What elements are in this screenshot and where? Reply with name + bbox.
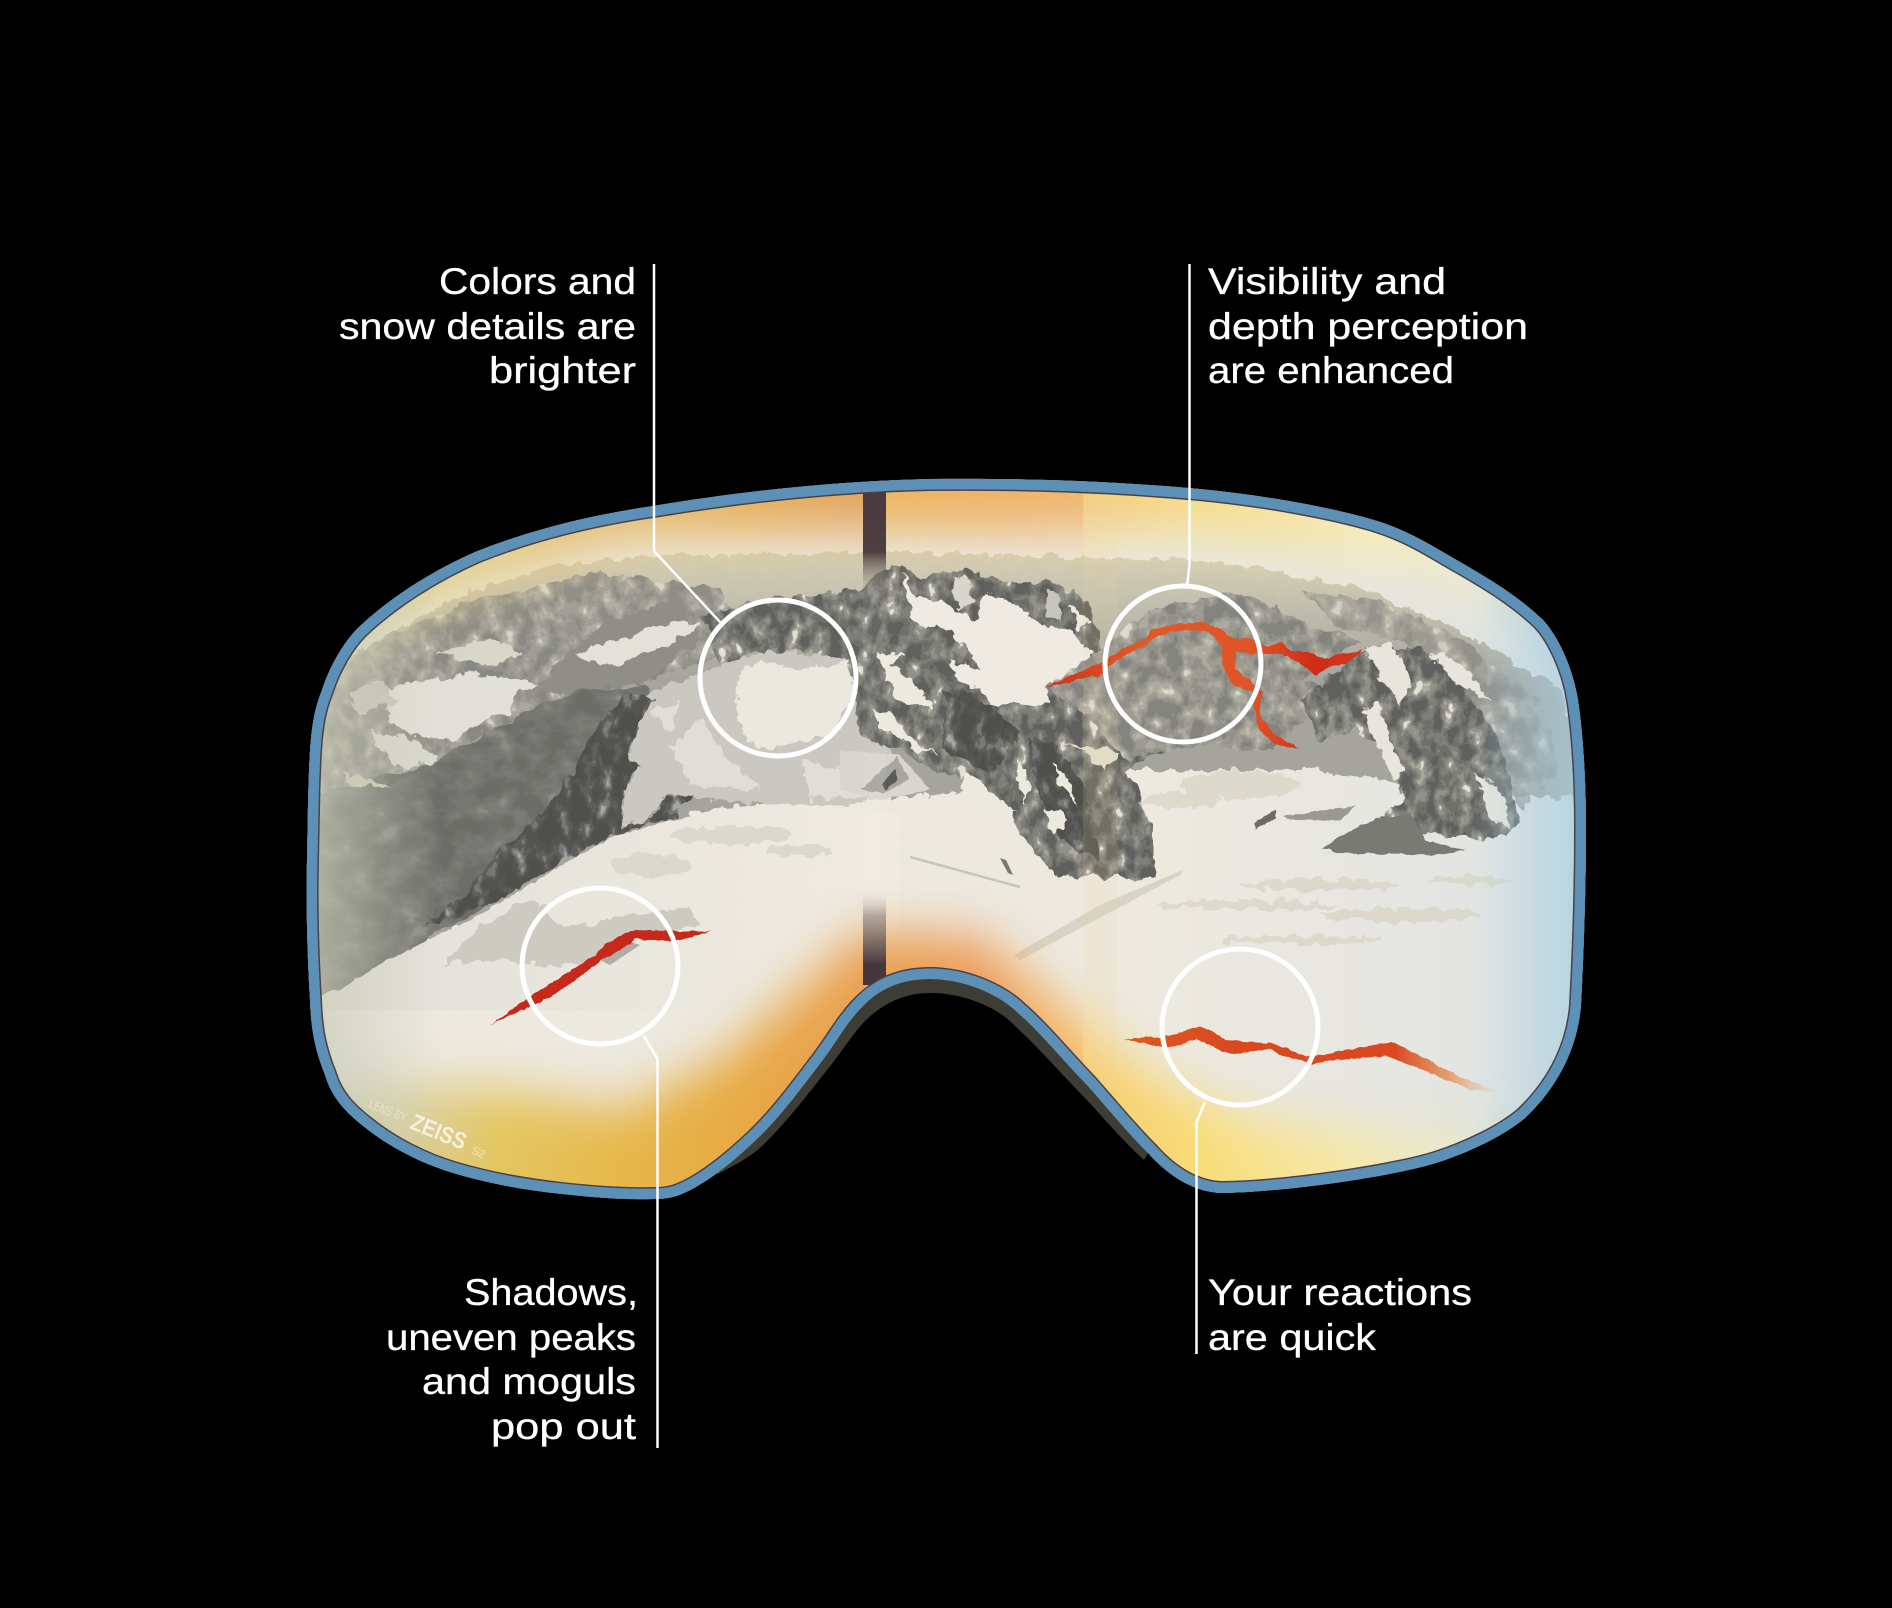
far mountain range (305, 552, 1590, 1000)
caption: shadows, peaks and moguls: uneven peaks (386, 1317, 636, 1358)
goggle foam under nose bridge (714, 979, 1148, 1174)
central foothill haze (840, 750, 930, 800)
hill light patches (650, 700, 880, 800)
central rock body (840, 567, 1180, 880)
snow hump (305, 804, 900, 1010)
circle: shadows and moguls (522, 888, 678, 1044)
central snow patches (870, 575, 1090, 837)
circle: reactions (1162, 949, 1318, 1105)
ski goggle lens (290, 470, 1600, 1220)
circle: colors and snow details (700, 600, 856, 756)
slope line (910, 857, 1020, 887)
caption: reactions: Your reactions (1208, 1272, 1472, 1313)
snow base (290, 470, 1600, 1210)
cool snow tone (1350, 514, 1586, 1181)
leader line: colors (654, 264, 720, 622)
caption: visibility and depth perception: Visibility and (1208, 261, 1446, 302)
caption: shadows, peaks and moguls (386, 1272, 638, 1447)
dark inner frame line (307, 479, 1586, 1199)
central snow slope (900, 570, 1093, 707)
lens brand mark: S2 (470, 1145, 487, 1161)
small rock mark (1000, 858, 1013, 875)
caption: colors and snow details: brighter (489, 350, 636, 391)
hump shading (610, 826, 830, 877)
lower dark cliff (1027, 740, 1100, 860)
caption: colors and snow details: snow details are (339, 306, 636, 347)
far right foothills (1300, 590, 1560, 810)
ski track (1014, 870, 1183, 960)
shadow under ridge (600, 940, 640, 965)
caption: visibility and depth perception: depth perception (1208, 306, 1528, 347)
upper right massif (1044, 590, 1360, 760)
cliff snow shelf (1064, 743, 1120, 770)
leader line: reactions (1196, 1102, 1205, 1354)
left upper shaded ridge (540, 600, 700, 693)
left edge fade (300, 470, 440, 1210)
central strip (863, 490, 886, 985)
caption: reactions (1208, 1272, 1472, 1358)
caption: colors and snow details: Colors and (439, 261, 636, 302)
right peak (1300, 645, 1520, 840)
blue goggle frame (307, 479, 1586, 1199)
caption: shadows, peaks and moguls: and moguls (422, 1361, 636, 1402)
left snow patches (343, 622, 703, 787)
right lower rocks (1254, 806, 1465, 855)
lens seam band (1083, 490, 1118, 1130)
rock above first circle (699, 590, 850, 664)
lens brand mark: LENS BY (367, 1096, 410, 1125)
caption: shadows, peaks and moguls: Shadows, (464, 1272, 638, 1313)
bright snow in first circle (735, 660, 858, 750)
lens colour tint (290, 470, 1600, 1220)
central dark cliff (943, 690, 1020, 775)
left valley shadow (305, 683, 660, 1000)
right blue edge tint (1470, 470, 1600, 1210)
right snow stripes (1361, 644, 1510, 830)
lens brand mark: ZEISS (407, 1109, 471, 1155)
circle: visibility and depth (1105, 586, 1261, 742)
red highlight: mogul line (1124, 1027, 1499, 1093)
leader line: shadows (644, 1036, 658, 1448)
caption: visibility and depth perception (1208, 261, 1528, 391)
caption: shadows, peaks and moguls: pop out (491, 1406, 637, 1447)
red highlight: mountain ridge (1044, 622, 1363, 748)
light hill beneath first circle (620, 650, 900, 827)
caption: reactions: are quick (1208, 1317, 1377, 1358)
hillside rock near third circle (443, 900, 700, 966)
lens brand mark (364, 1091, 491, 1163)
dark rock band (423, 693, 690, 927)
leader line: visibility (1187, 264, 1190, 586)
left mountain flank (310, 572, 760, 800)
caption: visibility and depth perception: are enhanced (1208, 350, 1454, 391)
red highlight: shadow ridge (490, 930, 710, 1026)
caption: colors and snow details (339, 261, 636, 391)
glacier markings (1140, 771, 1510, 944)
